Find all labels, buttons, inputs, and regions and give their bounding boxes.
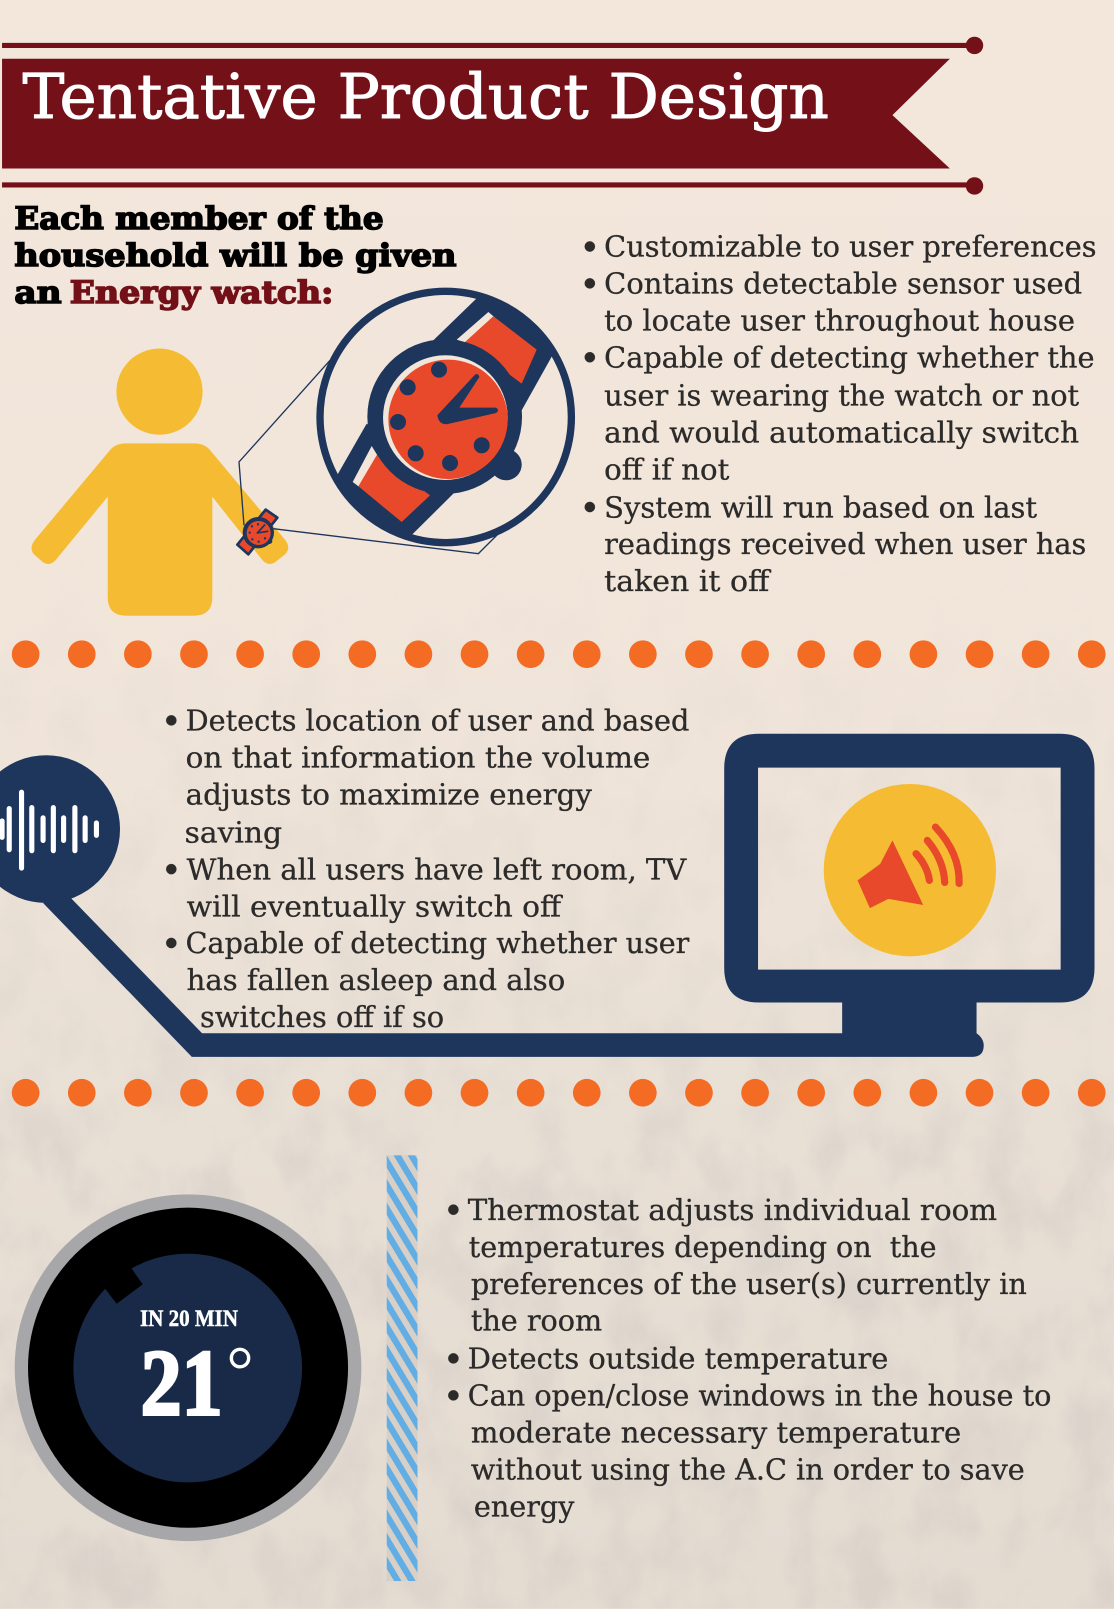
text block: TV features: Capable of detecting whether user — [186, 926, 690, 960]
text block: watch features: and would automatically switch — [604, 415, 1079, 449]
text block: TV features: When all users have left room, TV — [187, 852, 688, 886]
text block: thermostat features: moderate necessary temperature — [471, 1416, 961, 1450]
TV monitor — [724, 734, 1095, 1002]
text block: thermostat features: energy — [474, 1489, 575, 1523]
dotted divider 1 — [12, 640, 1106, 668]
icon: thermostat dial — [15, 1194, 361, 1541]
text block: watch features: Capable of detecting whether the — [604, 341, 1095, 375]
heading: energy watch intro: an — [14, 275, 62, 311]
text block: thermostat features: Can open/close windows in the house to — [468, 1379, 1051, 1413]
lens ring — [320, 291, 571, 543]
text block: TV features — [166, 704, 690, 1034]
watch case — [367, 339, 522, 494]
text block: thermostat features: Detects outside temperature — [468, 1342, 888, 1376]
small watch on wrist — [237, 510, 277, 554]
text block: watch features: taken it off — [604, 564, 772, 598]
heading: energy watch intro: Each member of the — [14, 201, 384, 237]
text block: watch features: off if not — [604, 452, 730, 486]
watch hands — [437, 374, 498, 424]
heading: energy watch intro — [14, 201, 456, 311]
sensor disc — [0, 755, 120, 903]
callout lines — [239, 360, 500, 554]
striped vertical divider — [387, 1155, 417, 1581]
text block: thermostat features: without using the A.C in order to save — [471, 1452, 1025, 1486]
text block: watch features — [585, 230, 1097, 598]
thermostat label: IN 20 MIN — [140, 1306, 238, 1332]
text block: thermostat features: the room — [471, 1304, 602, 1338]
text block: watch features: System will run based on last — [604, 490, 1038, 524]
text block: TV features: on that information the volume — [186, 741, 650, 775]
icon: speaker — [824, 784, 996, 956]
icon: person wearing watch — [32, 349, 288, 616]
text block: TV features: saving — [185, 815, 282, 849]
heading: energy watch intro: Energy watch: — [70, 275, 333, 311]
text block: TV features: Detects location of user and based — [186, 704, 689, 738]
crown — [490, 449, 522, 480]
title banner — [2, 37, 983, 195]
thermostat temperature: 21 — [141, 1332, 223, 1436]
text block: TV features: will eventually switch off — [187, 889, 564, 923]
text block: watch features: user is wearing the watch or not — [604, 378, 1080, 412]
cable — [43, 897, 984, 1057]
text block: TV features: has fallen asleep and also — [187, 963, 565, 997]
icon: magnified watch with callout lines — [237, 291, 571, 554]
text block: thermostat features: preferences of the user(s) currently in — [471, 1267, 1027, 1301]
text block: watch features: Contains detectable sensor used — [604, 267, 1082, 301]
background texture — [0, 768, 1114, 1609]
degree sign: ° — [226, 1332, 254, 1408]
text block: watch features: Customizable to user preferences — [604, 230, 1097, 264]
text block: thermostat features — [448, 1193, 1051, 1523]
text block: TV features: adjusts to maximize energy — [186, 777, 593, 811]
heading: energy watch intro: household will be given — [14, 238, 456, 274]
text block: thermostat features: Thermostat adjusts individual room — [468, 1193, 997, 1227]
icon: sound sensor with cable and TV monitor — [0, 734, 1095, 1057]
text block: TV features: switches off if so — [200, 1000, 444, 1034]
text block: watch features: readings received when user has — [604, 527, 1086, 561]
title: Tentative Product Design — [23, 61, 829, 133]
dotted divider 2 — [12, 1079, 1106, 1107]
text block: thermostat features: temperatures depending on the — [469, 1230, 937, 1264]
text block: watch features: to locate user throughout house — [604, 304, 1075, 338]
watch strap — [433, 298, 553, 410]
hour markers — [390, 362, 490, 471]
